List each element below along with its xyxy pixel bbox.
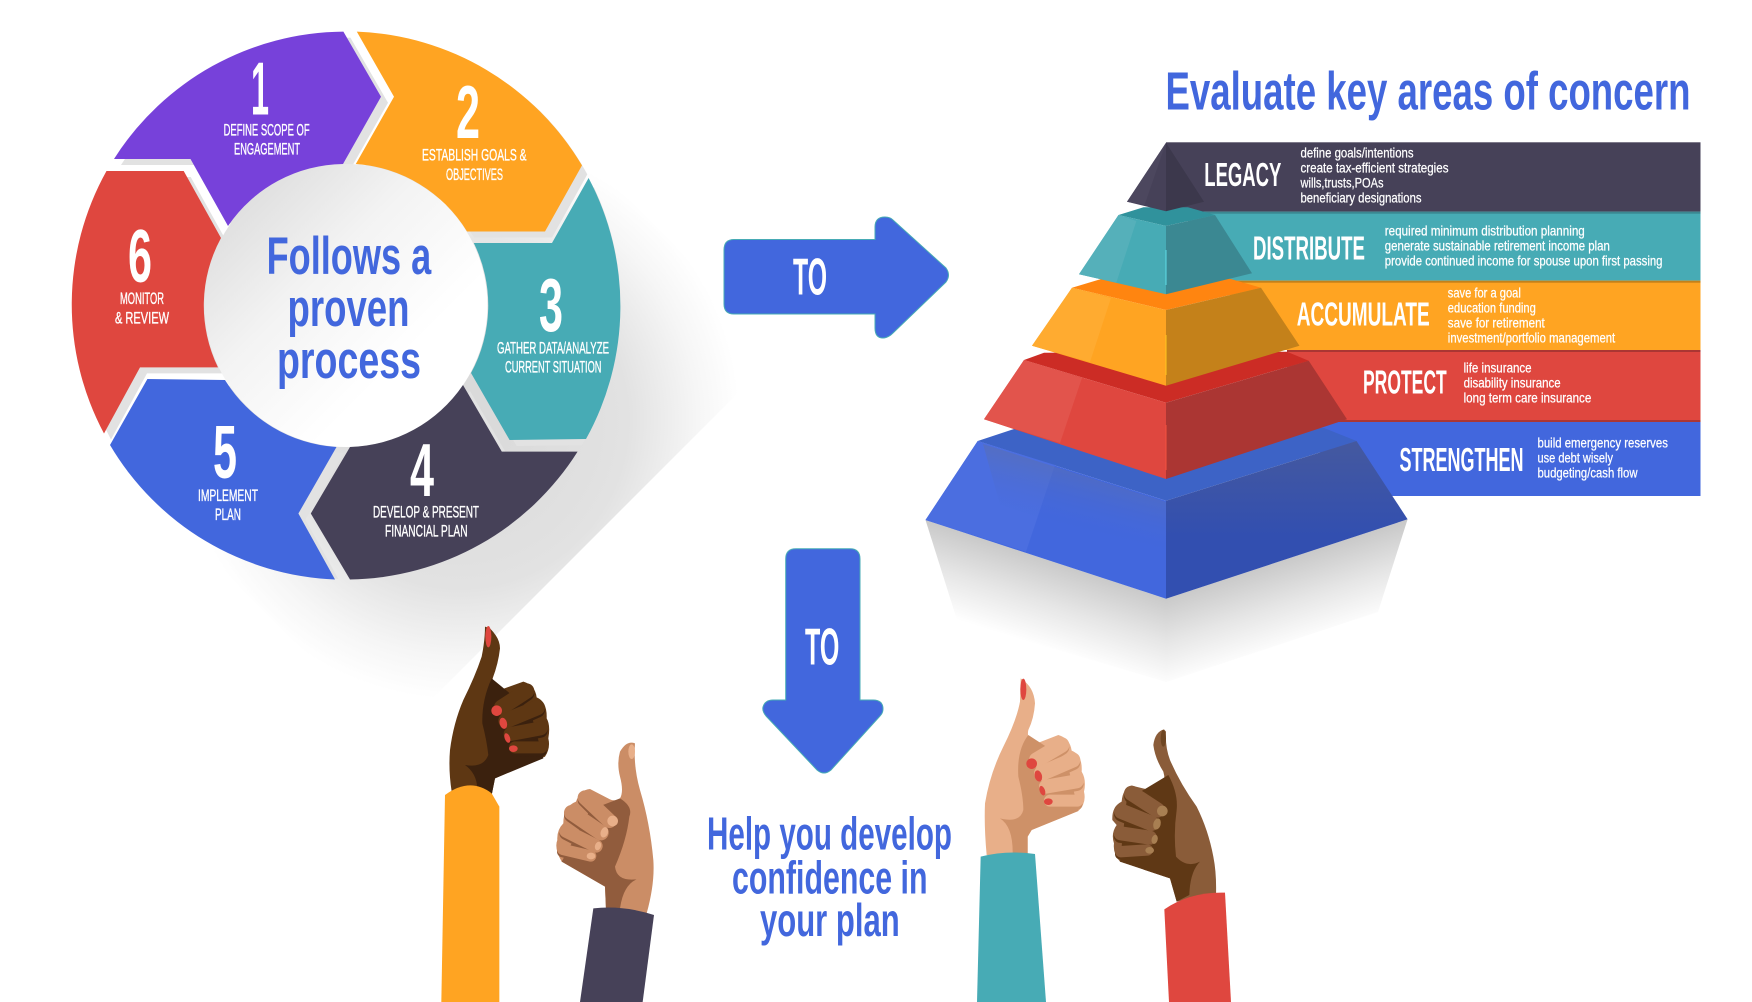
segment 3: gather data: GATHER DATA/ANALYZE — [497, 338, 609, 357]
band: protect — [1287, 350, 1700, 420]
panel: process wheel — [72, 32, 702, 662]
wheel centre hub — [204, 164, 488, 447]
band: distribute: generate sustainable retirement income plan — [1385, 238, 1610, 254]
band: protect: life insurance — [1464, 360, 1532, 376]
band: legacy — [1166, 142, 1700, 212]
band: strengthen: STRENGTHEN — [1400, 441, 1524, 478]
heading: help you develop confidence — [707, 807, 952, 946]
segment 4: develop plan: FINANCIAL PLAN — [385, 522, 468, 540]
arrow: down TO — [763, 549, 883, 773]
band: protect: PROTECT — [1363, 363, 1447, 400]
band: accumulate: education funding — [1448, 299, 1536, 315]
band: strengthen: build emergency reserves — [1538, 434, 1668, 450]
band: accumulate — [1230, 281, 1700, 350]
pyramid ground shadow — [926, 519, 1408, 682]
band: legacy: wills,trusts,POAs — [1300, 174, 1384, 190]
wheel centre heading — [267, 227, 432, 390]
segment 5: implement plan: IMPLEMENT — [198, 486, 258, 505]
segment 6: monitor and review: & REVIEW — [115, 308, 169, 328]
pyramid tier: orange — [1032, 279, 1300, 386]
arrow: down TO: TO — [805, 618, 839, 676]
segment 3: gather data: 3 — [539, 263, 563, 347]
pyramid apex — [1127, 143, 1204, 211]
band: legacy: define goals/intentions — [1300, 144, 1414, 160]
segment 4: develop plan: 4 — [410, 428, 434, 512]
segment 1: define scope — [114, 32, 381, 226]
wheel centre heading: Follows a — [267, 227, 432, 286]
segment 1: define scope: ENGAGEMENT — [234, 140, 300, 158]
band: legacy: create tax-efficient strategies — [1300, 159, 1448, 175]
pyramid tier: blue — [926, 428, 1408, 599]
band: distribute: DISTRIBUTE — [1253, 229, 1365, 266]
band: protect: long term care insurance — [1464, 389, 1591, 405]
band: accumulate: save for retirement — [1448, 314, 1545, 330]
segment 5: implement plan: PLAN — [215, 505, 241, 524]
hand: light thumbs up with teal sleeve — [977, 678, 1085, 1002]
segment 2: establish goals: ESTABLISH GOALS & — [422, 146, 527, 165]
heading: help you develop confidence: confidence in — [732, 852, 928, 904]
band: protect: disability insurance — [1464, 374, 1561, 390]
pyramid tier: red — [984, 352, 1347, 479]
segment 2: establish goals: 2 — [456, 70, 480, 154]
band: accumulate: save for a goal — [1448, 284, 1521, 300]
segment 3: gather data: CURRENT SITUATION — [505, 357, 602, 376]
segment 1: define scope: DEFINE SCOPE OF — [224, 120, 310, 140]
arrow: right TO — [724, 217, 948, 338]
segment 5: implement plan: 5 — [213, 410, 237, 494]
segment 6: monitor and review: MONITOR — [120, 289, 164, 308]
heading: help you develop confidence: your plan — [760, 894, 900, 946]
band: strengthen — [1320, 420, 1700, 496]
band: accumulate: ACCUMULATE — [1297, 296, 1430, 333]
wheel segment gap shadows — [79, 38, 627, 586]
wheel long shadow — [152, 111, 780, 739]
wheel centre heading: process — [277, 331, 421, 390]
hand: brown thumbs up with red sleeve — [1112, 729, 1231, 1002]
band: distribute — [1188, 212, 1700, 281]
panel: pyramid with bands — [926, 142, 1700, 682]
band: accumulate: investment/portfolio management — [1448, 329, 1615, 345]
segment 6: monitor and review — [72, 171, 221, 434]
band: legacy: LEGACY — [1204, 156, 1281, 193]
hand: dark thumbs up with orange sleeve — [441, 626, 549, 1002]
band: strengthen: use debt wisely — [1538, 449, 1613, 465]
band: distribute: provide continued income for spouse upon first passing — [1385, 253, 1662, 269]
segment 2: establish goals: OBJECTIVES — [446, 165, 503, 184]
band: legacy: beneficiary designations — [1300, 189, 1422, 205]
hand: tan thumbs up with dark sleeve — [556, 743, 654, 1002]
arrow: right TO: TO — [793, 249, 827, 307]
segment 3: gather data — [471, 178, 620, 440]
heading: help you develop confidence: Help you develop — [707, 807, 952, 859]
pyramid tier: teal — [1079, 207, 1252, 294]
segment 6: monitor and review: 6 — [128, 214, 152, 298]
segment 4: develop plan — [311, 385, 578, 580]
segment 1: define scope: 1 — [251, 46, 269, 130]
segment 5: implement plan — [110, 379, 336, 580]
band: distribute: required minimum distribution planning — [1385, 223, 1585, 239]
band: strengthen: budgeting/cash flow — [1538, 464, 1638, 480]
segment 4: develop plan: DEVELOP & PRESENT — [373, 502, 479, 522]
segment 2: establish goals — [356, 32, 582, 231]
wheel centre heading: proven — [288, 279, 410, 338]
